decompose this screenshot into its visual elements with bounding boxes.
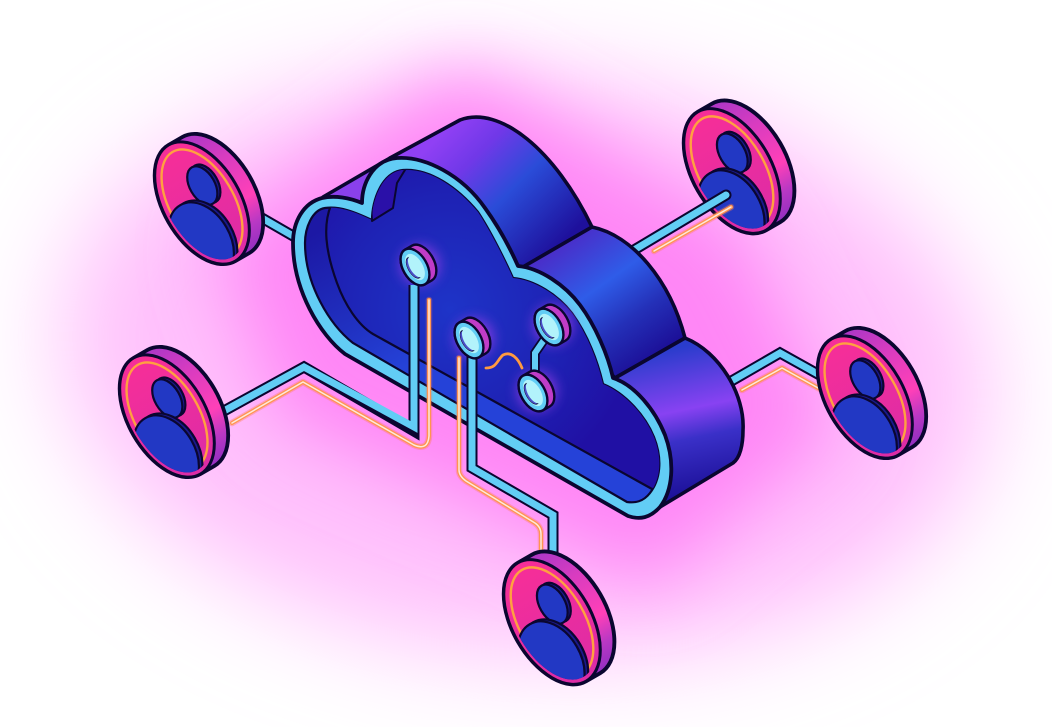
connector: left middle user to cloud socket — [222, 285, 429, 447]
user disk: top right — [655, 84, 818, 262]
cloud rim — [293, 158, 671, 518]
person head: top right — [711, 126, 757, 178]
person body: bottom — [504, 607, 602, 713]
cloud extrusion: middle bump — [523, 227, 685, 378]
link between sockets — [535, 340, 544, 378]
socket 4 — [513, 366, 560, 416]
person head: bottom — [531, 577, 577, 629]
person head: right — [844, 353, 890, 404]
socket 2 — [449, 313, 496, 363]
user disk: bottom — [475, 535, 638, 713]
person body: right — [818, 383, 914, 486]
cloud — [293, 100, 743, 518]
person body: top left — [155, 189, 251, 292]
cloud inner back wall — [325, 170, 660, 490]
connector: left top user to cloud — [255, 214, 300, 240]
socket glows — [400, 245, 573, 411]
socket 1 — [395, 240, 442, 290]
person body: top right — [684, 156, 782, 262]
person head: top left — [181, 159, 227, 210]
cloud extrusion: right bump — [615, 338, 743, 510]
connector: top right user to cloud — [634, 195, 731, 251]
user disk: left middle — [91, 331, 252, 505]
user disk: right — [789, 312, 950, 486]
connector: socket to bottom user — [459, 350, 553, 565]
person head: left middle — [146, 372, 192, 423]
cloud extrusion: top bump — [390, 117, 592, 267]
cloud extrusion: left top face — [323, 158, 390, 205]
connector: right user to cloud — [728, 353, 825, 390]
orange squiggle — [486, 354, 522, 368]
person body: left middle — [120, 402, 216, 505]
user disk: top left — [126, 118, 287, 292]
socket 3 — [529, 300, 576, 350]
cloud inner floor — [305, 170, 659, 502]
